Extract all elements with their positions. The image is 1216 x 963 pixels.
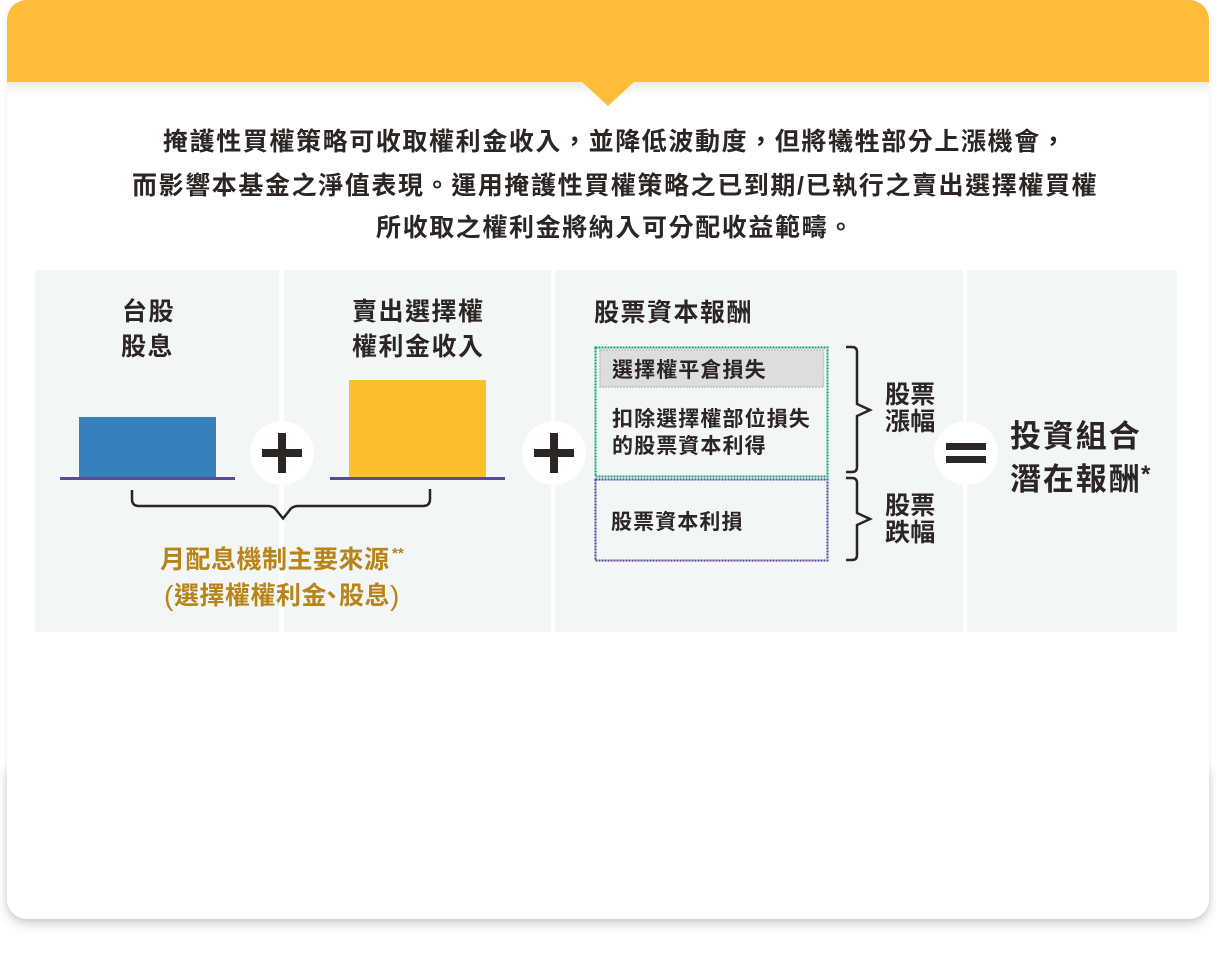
heading: option premium bbox=[352, 298, 485, 361]
caption: monthly distribution source: 月配息機制主要來源 bbox=[160, 546, 390, 574]
net gain text: 扣除選擇權部位損失 bbox=[612, 407, 811, 431]
net gain text bbox=[612, 407, 811, 458]
panel: total return bbox=[967, 270, 1177, 632]
heading: dividend: 股息 bbox=[121, 333, 174, 361]
header band bbox=[7, 0, 1209, 106]
label: stock rise bbox=[885, 381, 936, 436]
card lower shadow bbox=[7, 765, 1209, 919]
label: stock rise: 股票 bbox=[885, 381, 936, 409]
bar: option premium bbox=[330, 380, 505, 480]
net gain text: 的股票資本利得 bbox=[612, 434, 767, 458]
box: option-adjusted gain bbox=[596, 348, 828, 476]
caption: monthly distribution source: ) bbox=[390, 580, 400, 611]
option close loss row bbox=[600, 350, 824, 387]
brace: fall bbox=[846, 478, 870, 560]
caption: monthly distribution source: 選擇權權利金 bbox=[174, 582, 327, 610]
brace: rise bbox=[846, 347, 870, 472]
caption: monthly distribution source: 股息 bbox=[339, 582, 390, 610]
box: capital loss: 股票資本利損 bbox=[611, 510, 744, 534]
label: stock fall: 跌幅 bbox=[885, 519, 936, 547]
caption: monthly distribution source: ** bbox=[392, 545, 404, 562]
heading: dividend: 台股 bbox=[122, 297, 175, 326]
caption: monthly distribution source bbox=[160, 545, 404, 611]
icon: equals bbox=[934, 421, 998, 485]
intro text: 而影響本基金之淨值表現。運用掩護性買權策略之已到期/已執行之賣出選擇權買權 bbox=[132, 171, 1098, 200]
brace: monthly distribution bbox=[132, 489, 430, 518]
intro text: 掩護性買權策略可收取權利金收入，並降低波動度，但將犧牲部分上漲機會， bbox=[163, 128, 1067, 156]
bar: dividend bbox=[60, 417, 235, 480]
icon: plus 1 bbox=[250, 421, 314, 485]
result: total potential return: * bbox=[1141, 461, 1151, 488]
heading: option premium: 賣出選擇權 bbox=[352, 298, 485, 326]
panel: dividend bbox=[35, 270, 279, 632]
option close loss row: 選擇權平倉損失 bbox=[612, 358, 767, 382]
panel: equity return bbox=[555, 270, 963, 632]
heading: option premium: 權利金收入 bbox=[352, 333, 485, 361]
result: total potential return bbox=[1010, 419, 1151, 497]
heading: dividend bbox=[121, 297, 175, 361]
icon: plus 2 bbox=[522, 421, 586, 485]
heading: equity return: 股票資本報酬 bbox=[594, 299, 753, 327]
label: stock fall bbox=[885, 492, 936, 547]
intro text bbox=[132, 128, 1098, 242]
label: stock rise: 漲幅 bbox=[885, 408, 936, 436]
result: total potential return: 投資組合 bbox=[1010, 419, 1142, 454]
result: total potential return: 潛在報酬 bbox=[1010, 462, 1142, 497]
caption: monthly distribution source: 、 bbox=[319, 582, 345, 610]
caption: monthly distribution source: ( bbox=[164, 580, 174, 611]
label: stock fall: 股票 bbox=[885, 492, 936, 520]
intro text: 所收取之權利金將納入可分配收益範疇。 bbox=[376, 213, 855, 242]
panel: option premium bbox=[284, 270, 551, 632]
box: capital loss bbox=[596, 480, 828, 560]
